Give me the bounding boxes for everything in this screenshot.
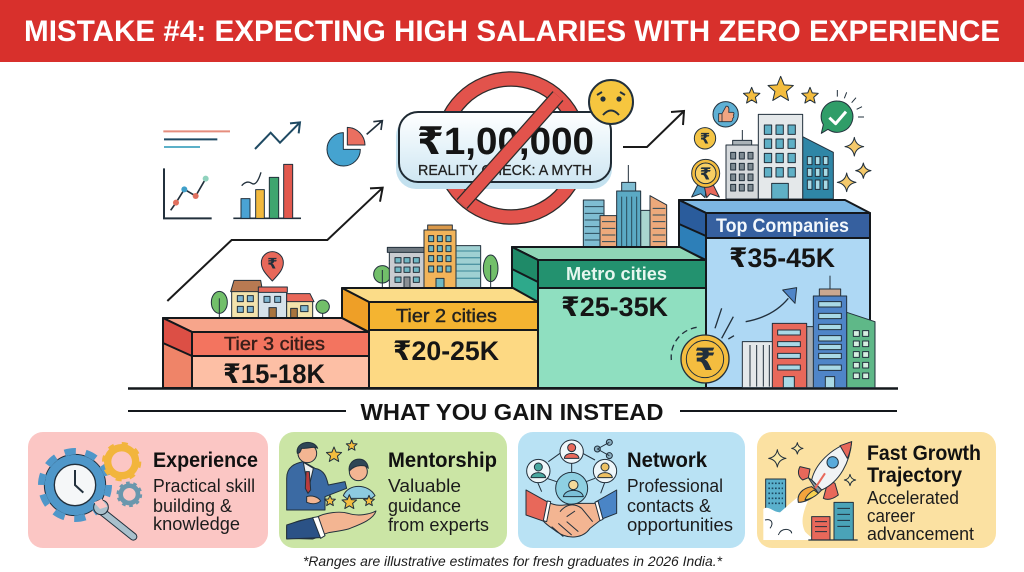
step: tier 2 cities: Tier 2 cities: [396, 305, 497, 326]
tier 3 town: ₹: [267, 256, 277, 272]
icon: sad face: [589, 80, 633, 124]
top companies icon cluster: ₹: [700, 132, 710, 148]
title banner: [0, 0, 1024, 62]
icon: mentor, mentee and hand with stars: [287, 440, 376, 539]
step: metro cities: [512, 247, 706, 388]
text: mentorship: [388, 449, 497, 535]
text: experience: Experience: [153, 449, 258, 472]
rising path arrow: [167, 188, 383, 301]
top companies foreground: coin, arrow, buildings: [671, 276, 875, 388]
text: fast growth: advancement: [867, 524, 974, 544]
step: top companies: [679, 200, 870, 388]
top companies icon cluster: ₹: [700, 164, 711, 183]
step: tier 2 cities: ₹20-25K: [393, 336, 499, 366]
text: network: Network: [627, 449, 707, 472]
step: tier 3 cities: ₹15-18K: [223, 359, 325, 389]
reality check badge: ₹1,00,000: [417, 121, 594, 163]
text: experience: [153, 449, 258, 534]
small arrow to top companies: [623, 111, 684, 147]
text: experience: knowledge: [153, 514, 240, 534]
text: network: Professional: [627, 476, 723, 496]
text: network: opportunities: [627, 515, 733, 535]
text: experience: Practical skill: [153, 476, 255, 496]
panel: mentorship: [279, 432, 507, 548]
chart baseline: [128, 387, 898, 390]
step: tier 2 cities: [342, 288, 538, 388]
section heading: WHAT YOU GAIN INSTEAD: [360, 399, 664, 425]
text: fast growth: Accelerated: [867, 488, 959, 508]
salary staircase: [163, 200, 870, 389]
step: tier 3 cities: Tier 3 cities: [224, 333, 325, 354]
text: mentorship: Valuable: [388, 476, 461, 496]
text: fast growth: Trajectory: [867, 464, 962, 487]
panel: experience: [28, 432, 268, 548]
icon: rocket and city: [763, 442, 858, 540]
icon: network and handshake: [526, 439, 617, 537]
icon: clock gears and wrench: [41, 444, 141, 537]
step: top companies: Top Companies: [716, 216, 849, 237]
prohibition ring behind badge: [442, 79, 580, 217]
text: fast growth: [867, 442, 981, 544]
reality check badge: REALITY CHECK: A MYTH: [418, 163, 592, 179]
title banner: MISTAKE #4: EXPECTING HIGH SALARIES WITH ZERO EXPERIENCE: [24, 15, 1000, 48]
text: network: contacts &: [627, 496, 711, 516]
panel: network: [518, 432, 745, 548]
tier 3 town: [211, 252, 329, 318]
text: mentorship: from experts: [388, 515, 489, 535]
analytics doodles: [163, 121, 382, 218]
text: experience: building &: [153, 496, 232, 516]
text: network: [627, 449, 733, 535]
text: fast growth: career: [867, 506, 915, 526]
step: top companies: ₹35-45K: [729, 243, 835, 273]
top companies icon cluster: [692, 76, 871, 199]
tier 2 town: [374, 225, 498, 288]
text: fast growth: Fast Growth: [867, 442, 981, 465]
footnote: *Ranges are illustrative estimates for fresh graduates in 2026 India.*: [303, 553, 723, 569]
text: mentorship: guidance: [388, 496, 461, 516]
top companies foreground: coin, arrow, buildings: ₹: [694, 343, 716, 377]
reality check badge: [396, 112, 612, 189]
step: tier 3 cities: [163, 318, 369, 389]
panel: fast growth: [757, 432, 996, 548]
step: metro cities: Metro cities: [566, 263, 667, 284]
step: metro cities: ₹25-35K: [561, 292, 668, 322]
text: mentorship: Mentorship: [388, 449, 497, 472]
prohibition slash: [462, 96, 558, 204]
metro skyline: [583, 165, 667, 247]
